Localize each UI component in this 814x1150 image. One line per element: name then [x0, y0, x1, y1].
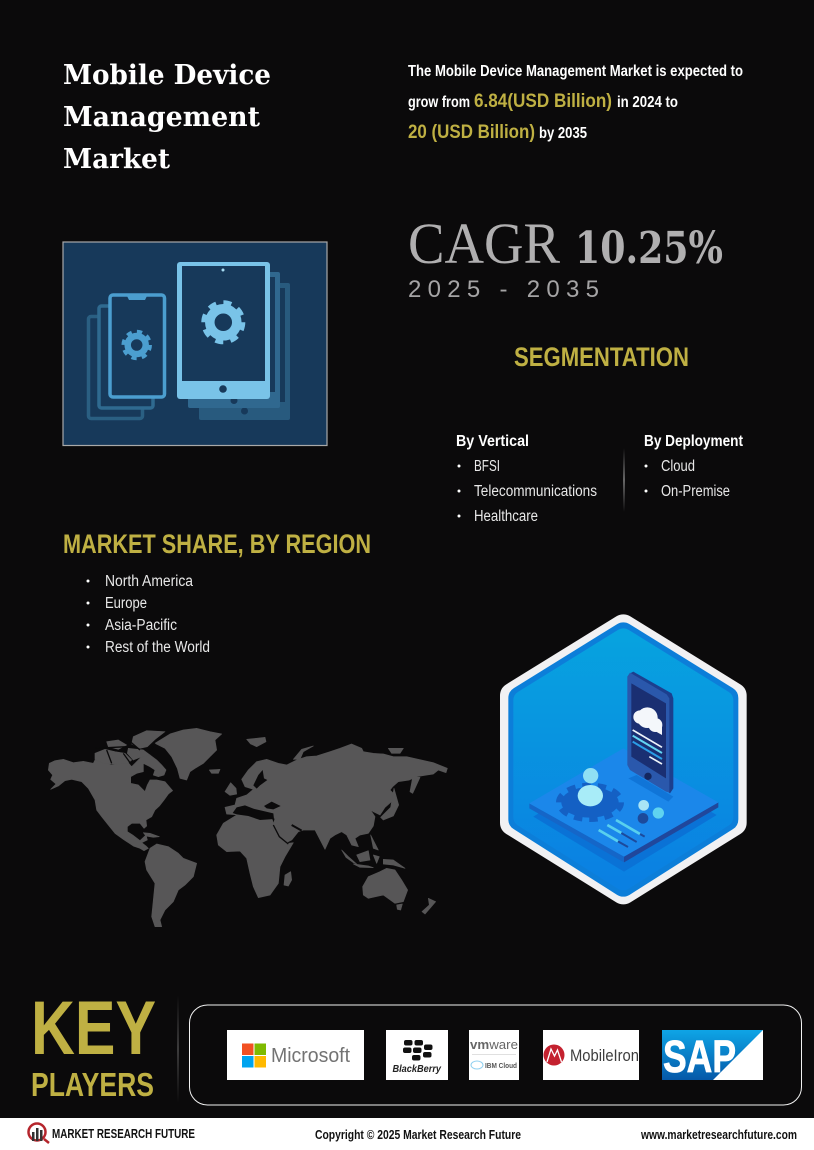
- region list: Europe: [105, 595, 147, 612]
- market forecast text: 20 (USD Billion): [408, 122, 535, 143]
- footer brand: MARKET RESEARCH FUTURE: [52, 1126, 195, 1141]
- segmentation: by vertical: Healthcare: [474, 508, 538, 525]
- dots and sliders: [599, 800, 664, 847]
- icon: back tablets: [188, 272, 290, 420]
- CAGR figure: 2025 - 2035: [408, 276, 599, 303]
- logo: VMware IBM Cloud: IBM Cloud: [485, 1063, 517, 1070]
- segmentation: by deployment: On-Premise: [661, 483, 730, 500]
- logo: MobileIron: [543, 1030, 639, 1080]
- segmentation heading: SEGMENTATION: [514, 342, 689, 372]
- market share heading: MARKET SHARE, BY REGION: [63, 529, 371, 559]
- key players panel: [190, 1005, 802, 1105]
- icon: tablet: [177, 262, 270, 399]
- logo: BlackBerry: BlackBerry: [392, 1063, 442, 1075]
- segmentation: by vertical: Telecommunications: [474, 483, 597, 500]
- platform: [529, 748, 718, 872]
- logo: Microsoft: Microsoft: [271, 1045, 350, 1067]
- segmentation: by deployment: By Deployment: [644, 433, 743, 450]
- segmentation: by vertical: By Vertical: [456, 433, 529, 450]
- segmentation: by vertical: [456, 433, 597, 525]
- market forecast text: in 2024 to: [617, 94, 678, 111]
- logo: Microsoft: [227, 1030, 364, 1080]
- icon: phone: [110, 295, 164, 397]
- key players label: [31, 986, 156, 1103]
- key players label: KEY: [31, 986, 156, 1071]
- CAGR figure: 10.25%: [575, 223, 723, 274]
- title: Market: [63, 144, 171, 175]
- footer band: [0, 1118, 814, 1150]
- world map: [48, 728, 447, 927]
- illustration: mobile cloud hexagon: [513, 628, 733, 891]
- market forecast text: by 2035: [539, 125, 587, 142]
- title: [63, 60, 271, 175]
- segmentation: by deployment: [644, 433, 743, 500]
- key players label: PLAYERS: [31, 1066, 154, 1103]
- logo: VMware IBM Cloud: [469, 1030, 519, 1080]
- segmentation divider: [624, 448, 625, 512]
- region list: Rest of the World: [105, 639, 210, 656]
- region list: [86, 573, 210, 656]
- title: Mobile Device: [63, 60, 271, 91]
- market forecast text: [408, 63, 743, 143]
- segmentation: by vertical: BFSI: [474, 458, 500, 475]
- logo: MobileIron: MobileIron: [570, 1046, 639, 1065]
- gear and user: [559, 768, 621, 819]
- market forecast text: grow from: [408, 94, 470, 111]
- logo: BlackBerry: [386, 1030, 448, 1080]
- footer copyright: Copyright © 2025 Market Research Future: [315, 1127, 521, 1142]
- region list: North America: [105, 573, 193, 590]
- phone: [627, 672, 673, 802]
- market forecast text: 6.84(USD Billion): [474, 91, 612, 112]
- icon: back phones: [88, 306, 153, 418]
- key players divider: [178, 995, 179, 1103]
- logo: VMware IBM Cloud: vmware: [470, 1037, 518, 1052]
- region list: Asia-Pacific: [105, 617, 177, 634]
- market forecast text: The Mobile Device Management Market is expected to: [408, 63, 743, 80]
- CAGR figure: [408, 211, 723, 303]
- title: Management: [63, 102, 261, 133]
- segmentation: by deployment: Cloud: [661, 458, 695, 475]
- icon: MRFR logo: [28, 1124, 49, 1143]
- illustration: device management panel: [63, 242, 327, 446]
- CAGR figure: CAGR: [408, 211, 560, 276]
- logo: SAP: SAP: [663, 1031, 736, 1082]
